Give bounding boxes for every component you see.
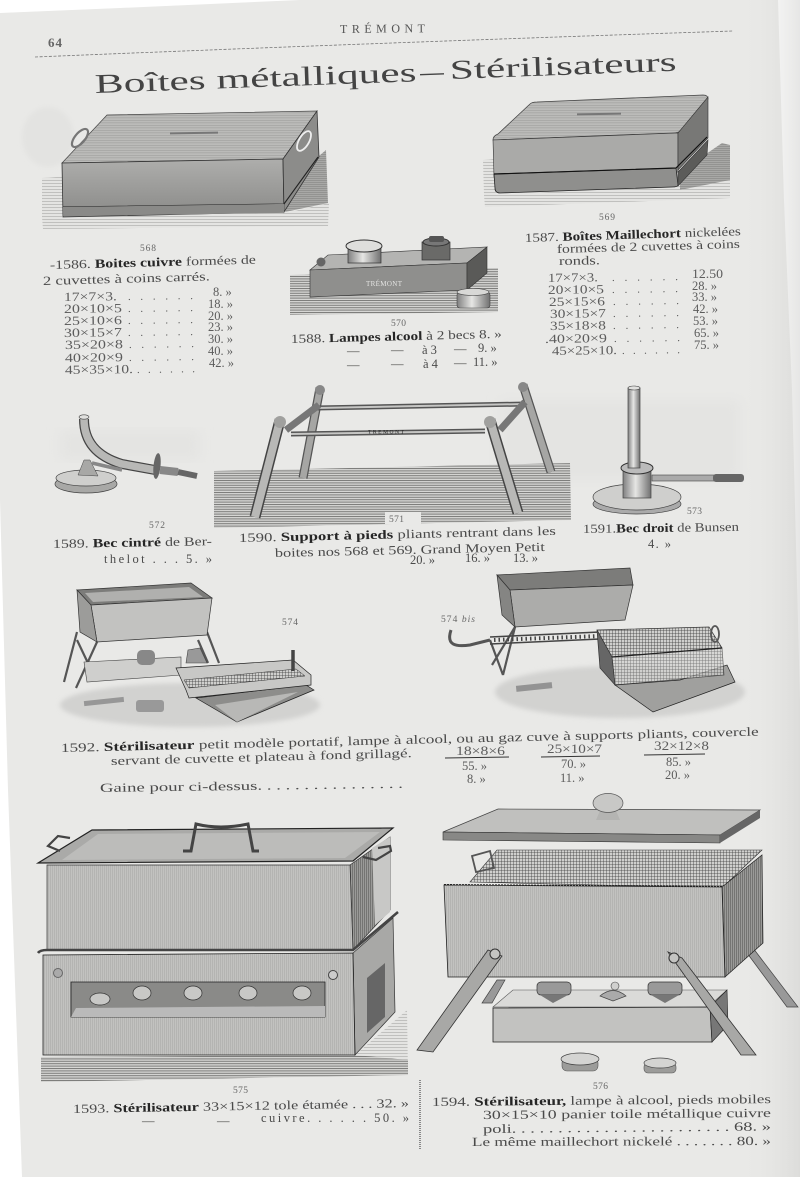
text block 1587: 20×10×5 — [548, 282, 604, 297]
illustration 574 bis: sterilizer with gas burner and basket — [450, 568, 745, 718]
text block 1586: 45×35×10. — [65, 362, 133, 377]
caption 571: 571 — [389, 515, 404, 525]
price table 1592: 11. » — [560, 771, 585, 785]
text block 1593 — [73, 1096, 409, 1128]
running head: TRÉMONT — [340, 21, 426, 36]
back legs — [482, 980, 505, 1003]
text block 1586: 23. » — [208, 320, 233, 334]
text block 1588: à 3 — [422, 343, 437, 357]
text block 1586: . . . . . . — [137, 363, 195, 376]
text block 1586: 2 cuvettes à coins carrés. — [43, 269, 210, 288]
text block 1587: . . . . . . — [622, 344, 680, 357]
illustration 571: folding stand: TREMONT — [368, 430, 405, 436]
text block 1586: . . . . . . — [128, 314, 193, 327]
text block 1588: — — [390, 343, 404, 357]
caption 576: 576 — [593, 1082, 608, 1092]
caption 574: 574 — [282, 618, 298, 628]
text block 1591: 4. » — [648, 537, 671, 551]
text block 1587: .40×20×9 — [545, 331, 607, 346]
illustration 570: alcohol lamp: TRÉMONT — [366, 280, 403, 288]
text block 1587: formées de 2 cuvettes à coins — [557, 237, 740, 256]
price table 1592: 8. » — [467, 772, 486, 786]
text block 1588: — — [390, 357, 404, 371]
price table 1592: 70. » — [561, 757, 586, 771]
illustration 576: sterilizer with basket and folding legs — [417, 794, 798, 1073]
price table 1592: 20. » — [665, 768, 690, 782]
text block 1590: 1590. Support à pieds pliants rentrant dans les — [239, 524, 556, 545]
illustration 575: large sterilizer with five burners — [38, 824, 408, 1082]
illustration 571: folding stand — [214, 382, 571, 528]
upper vessel — [47, 837, 390, 950]
text block 1586: 30×15×7 — [64, 325, 122, 340]
five burners — [90, 986, 311, 1005]
illustration 574: small portable sterilizer — [60, 583, 320, 727]
caption 568: 568 — [140, 244, 156, 254]
text block 1594: poli. . . . . . . . . . . . . . . . . . . . . . . . 68. » — [483, 1119, 771, 1136]
caption 575: 575 — [233, 1086, 248, 1096]
price table 1592: 18×8×6 — [456, 744, 505, 758]
text block 1593: — — [216, 1114, 230, 1128]
text block 1588: — — [346, 358, 360, 372]
text block 1588: 9. » — [478, 341, 497, 355]
text block 1587: 42. » — [693, 302, 718, 316]
text block 1594: 30×15×10 panier toile métallique cuivre — [483, 1106, 772, 1122]
text block 1587: 75. » — [694, 338, 719, 352]
text block 1586: . . . . . . — [129, 351, 194, 364]
vertical dotted rule — [419, 1080, 421, 1150]
loose caps — [561, 1053, 676, 1073]
text block 1587: 1587. Boîtes Maillechort nickelées — [525, 224, 741, 245]
vessel — [722, 855, 763, 977]
text block 1593: cuivre. . . . . . 50. » — [261, 1111, 409, 1125]
text block 1587 — [525, 224, 741, 358]
text block 1586: 30. » — [208, 332, 233, 346]
header dashed rule — [35, 31, 733, 57]
text block 1587: 28. » — [692, 279, 717, 293]
illustration 572: curved burner — [55, 415, 197, 493]
text block 1591 — [583, 520, 740, 551]
text block 1587: 65. » — [694, 326, 719, 340]
text block 1586: 8. » — [213, 285, 232, 299]
text block 1590: 16. » — [465, 551, 490, 565]
lower casing — [43, 918, 395, 1055]
page number: 64 — [48, 35, 62, 50]
text block 1586: . . . . . . — [128, 326, 193, 339]
text block 1590: 20. » — [410, 553, 435, 567]
text block 1588: — — [346, 344, 360, 358]
text block 1592: 1592. Stérilisateur petit modèle portatif, lampe à alcool, ou au gaz cuve à supports pliants, couvercle — [61, 725, 759, 755]
text block 1587: 17×7×3. — [548, 270, 598, 285]
title: Stérilisateurs — [449, 47, 677, 85]
illustration 570: alcohol lamp — [290, 236, 498, 315]
text block 1587: . . . . . . — [613, 307, 679, 320]
text block 1588: 1588. Lampes alcool à 2 becs 8. » — [291, 327, 502, 346]
illustration 573: Bunsen burner — [593, 386, 744, 514]
price table 1592 — [445, 739, 709, 786]
text block 1586: 40. » — [208, 344, 233, 358]
wire basket — [470, 850, 762, 888]
illustration 569: nickel box — [483, 95, 730, 207]
text block 1587: 35×18×8 — [550, 318, 606, 333]
text block 1586: 20×10×5 — [64, 301, 122, 316]
caption 573: 573 — [687, 507, 702, 517]
text block 1592 — [61, 725, 759, 795]
text block 1587: . . . . . . — [613, 295, 679, 308]
text block 1587: 12.50 — [692, 267, 723, 281]
text block 1587: 33. » — [692, 290, 717, 304]
text block 1587: 45×25×10. — [552, 343, 617, 358]
text block 1586: 25×10×6 — [64, 313, 122, 328]
text block 1591: 1591. Bec droit de Bunsen — [583, 520, 740, 536]
text block 1589: 1589. Bec cintré de Ber- — [53, 534, 212, 551]
text block 1593: — — [141, 1114, 155, 1128]
price table 1592: 85. » — [666, 755, 691, 769]
text block 1590: 13. » — [513, 551, 538, 565]
price table 1592: 25×10×7 — [547, 742, 602, 756]
text block 1590 — [239, 524, 556, 567]
text block 1587: . . . . . . — [614, 332, 680, 345]
text block 1586: 42. » — [209, 356, 234, 370]
text block 1588: à 4 — [423, 357, 439, 371]
text block 1588: 11. » — [473, 355, 498, 369]
text block 1586 — [43, 253, 257, 377]
title: Boîtes métalliques — [94, 57, 417, 99]
text block 1587: . . . . . . — [612, 271, 678, 284]
text block 1592: servant de cuvette et plateau à fond grillagé. — [111, 746, 412, 768]
text block 1587: 25×15×6 — [549, 294, 605, 309]
text block 1586: . . . . . . — [128, 290, 193, 303]
text block 1592: Gaine pour ci-dessus. . . . . . . . . . . . . . . . — [100, 777, 403, 795]
text block 1589: thelot . . . 5. » — [104, 552, 212, 566]
caption 570: 570 — [391, 319, 406, 329]
text block 1588 — [291, 327, 502, 372]
text block 1586: . . . . . . — [128, 302, 193, 315]
caption 569: 569 — [599, 213, 615, 223]
text block 1594: Le même maillechort nickelé . . . . . . . 80. » — [472, 1134, 771, 1149]
text block 1587: . . . . . . — [612, 283, 678, 296]
text block 1588: — — [453, 356, 467, 370]
removable lid with knob — [443, 794, 760, 843]
text block 1586: . . . . . . — [129, 338, 194, 351]
price table 1592: 55. » — [462, 759, 487, 773]
text block 1587: ronds. — [559, 253, 600, 268]
caption 572: 572 — [149, 521, 165, 531]
lid with handles — [38, 824, 393, 863]
text block 1586: 35×20×8 — [65, 337, 123, 352]
text block 1589 — [53, 534, 212, 566]
text block 1594 — [432, 1092, 772, 1149]
text block 1586: 18. » — [208, 297, 233, 311]
text block 1588: — — [453, 342, 467, 356]
front legs — [417, 950, 502, 1052]
text block 1593: 1593. Stérilisateur 33×15×12 tole étamée . . . 32. » — [73, 1096, 409, 1116]
text block 1586: 20. » — [208, 309, 233, 323]
title — [94, 47, 677, 99]
text block 1590: boites nos 568 et 569. Grand Moyen Petit — [275, 540, 546, 560]
text block 1587: 53. » — [693, 314, 718, 328]
text block 1586: -1586. Boites cuivre formées de — [50, 253, 257, 272]
caption 574 bis: 574 bis — [441, 615, 475, 625]
spirit stove — [493, 982, 728, 1042]
price table 1592: 32×12×8 — [654, 739, 709, 753]
text block 1594: 1594. Stérilisateur, lampe à alcool, pieds mobiles — [432, 1092, 771, 1109]
text block 1587: 30×15×7 — [550, 306, 606, 321]
text block 1586: 40×20×9 — [65, 350, 123, 365]
illustration 568: copper box — [42, 111, 329, 229]
text block 1586: 17×7×3. — [64, 289, 117, 304]
text block 1587: . . . . . . — [613, 319, 679, 332]
